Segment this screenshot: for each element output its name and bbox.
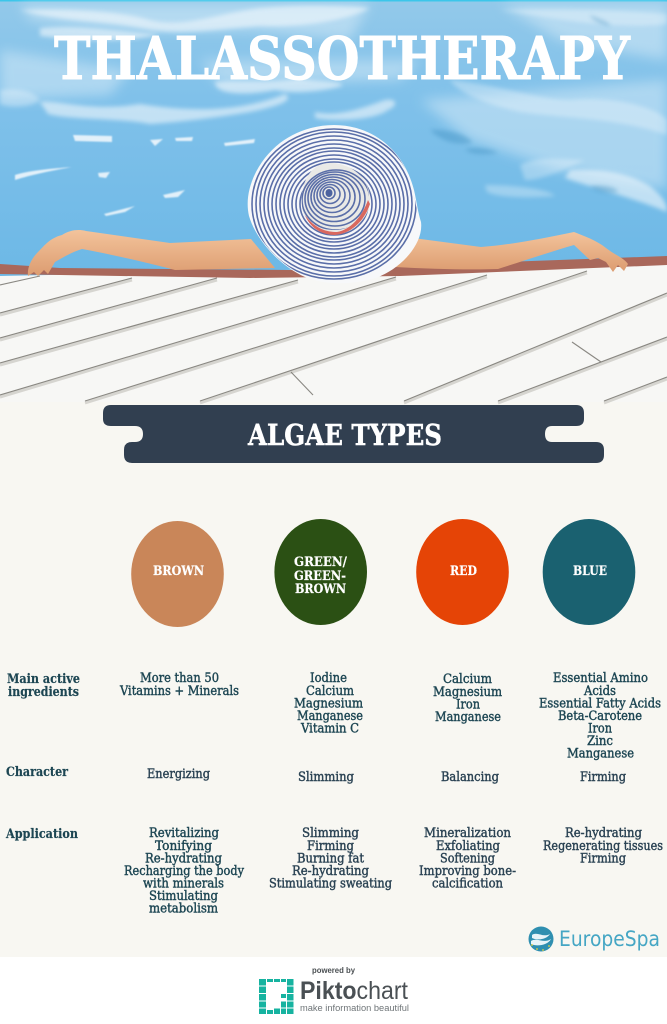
brown application	[124, 825, 245, 916]
brown application: with minerals	[143, 876, 224, 890]
blue ingredients: Essential Amino	[553, 670, 648, 685]
algae type: green / green-brown	[274, 519, 367, 625]
blue character: Firming	[580, 769, 626, 784]
Piktochart credit: make information beautiful	[300, 1003, 409, 1013]
column: green details	[269, 670, 392, 890]
blue application	[543, 825, 663, 866]
red ingredients: Magnesium	[433, 684, 502, 699]
right arm	[395, 232, 628, 272]
green ingredients: Manganese	[297, 708, 363, 723]
green ingredients: Iodine	[310, 670, 347, 685]
algae type: red: RED	[450, 563, 477, 579]
red ingredients: Iron	[456, 696, 480, 712]
blue ingredients: Manganese	[567, 746, 634, 760]
brown ingredients: More than 50	[140, 670, 219, 685]
brown ingredients: Vitamins + Minerals	[119, 683, 239, 698]
red application: Mineralization	[424, 825, 511, 840]
green application: Slimming	[302, 825, 359, 840]
blue application: Firming	[580, 850, 626, 866]
brown character: Energizing	[147, 766, 210, 781]
water	[0, 0, 667, 280]
blue application: Re-hydrating	[565, 825, 642, 840]
algae type: brown	[131, 521, 224, 627]
brown application: Recharging the body	[124, 863, 245, 878]
algae type: brown: BROWN	[153, 563, 204, 579]
label: main active ingredients: Main active	[7, 672, 80, 687]
green application: Re-hydrating	[292, 863, 369, 878]
left arm	[28, 230, 275, 276]
brown application: Re-hydrating	[145, 850, 222, 866]
green character: Slimming	[298, 769, 354, 784]
red application: Improving bone-	[419, 863, 516, 878]
footer strip	[0, 957, 667, 1024]
label: main active ingredients: ingredients	[8, 685, 79, 700]
green application: Stimulating sweating	[269, 876, 392, 890]
deck planks	[0, 262, 667, 403]
row labels	[5, 672, 80, 842]
pool rim	[0, 256, 667, 278]
brown ingredients	[119, 670, 239, 698]
blue ingredients: Iron	[588, 720, 612, 736]
heading banner: algae types	[103, 405, 604, 463]
icon: Piktochart grid logo	[259, 979, 294, 1014]
brown application: Stimulating	[149, 888, 218, 903]
Piktochart credit	[259, 965, 409, 1014]
blue ingredients: Acids	[583, 683, 616, 698]
red character: Balancing	[441, 769, 499, 784]
heading banner: algae types: ALGAE TYPES	[247, 418, 442, 452]
green ingredients: Magnesium	[294, 696, 363, 710]
green application: Firming	[307, 838, 354, 853]
algae type: blue: BLUE	[573, 563, 607, 579]
algae type: green / green-brown: GREEN/	[294, 554, 347, 570]
icon: EuropeSpa emblem	[528, 926, 554, 952]
column: brown details	[119, 670, 245, 916]
brown application: Tonifying	[155, 838, 212, 853]
column: red details	[419, 671, 516, 890]
blue ingredients: Zinc	[587, 733, 613, 748]
algae type: red	[416, 519, 509, 625]
column: blue details	[539, 670, 663, 866]
label: character: Character	[6, 765, 69, 780]
brown application: metabolism	[149, 900, 218, 916]
Piktochart credit: powered by	[312, 965, 355, 975]
green ingredients: Vitamin C	[300, 720, 359, 736]
red ingredients: Calcium	[443, 671, 492, 686]
algae type: green / green-brown: GREEN-	[294, 568, 346, 584]
blue ingredients	[539, 670, 661, 760]
striped sun hat	[248, 125, 421, 283]
label: main active ingredients	[7, 672, 80, 700]
red application	[419, 825, 516, 890]
red application: calcification	[432, 876, 503, 890]
brown application: Revitalizing	[149, 825, 219, 840]
green ingredients	[294, 670, 363, 736]
label: application: Application	[5, 827, 78, 842]
green application: Burning fat	[297, 850, 364, 866]
red ingredients: Manganese	[435, 709, 501, 724]
algae type: green / green-brown: BROWN	[295, 581, 346, 597]
red application: Softening	[440, 850, 495, 866]
Piktochart credit: Piktochart	[300, 977, 408, 1005]
green ingredients: Calcium	[306, 683, 354, 698]
red application: Exfoliating	[436, 838, 500, 853]
blue ingredients: Beta-Carotene	[558, 708, 642, 723]
algae type: blue	[543, 519, 635, 625]
hero photo: woman in hat at pool edge	[0, 0, 667, 403]
green application	[269, 825, 392, 890]
red ingredients	[433, 671, 502, 724]
